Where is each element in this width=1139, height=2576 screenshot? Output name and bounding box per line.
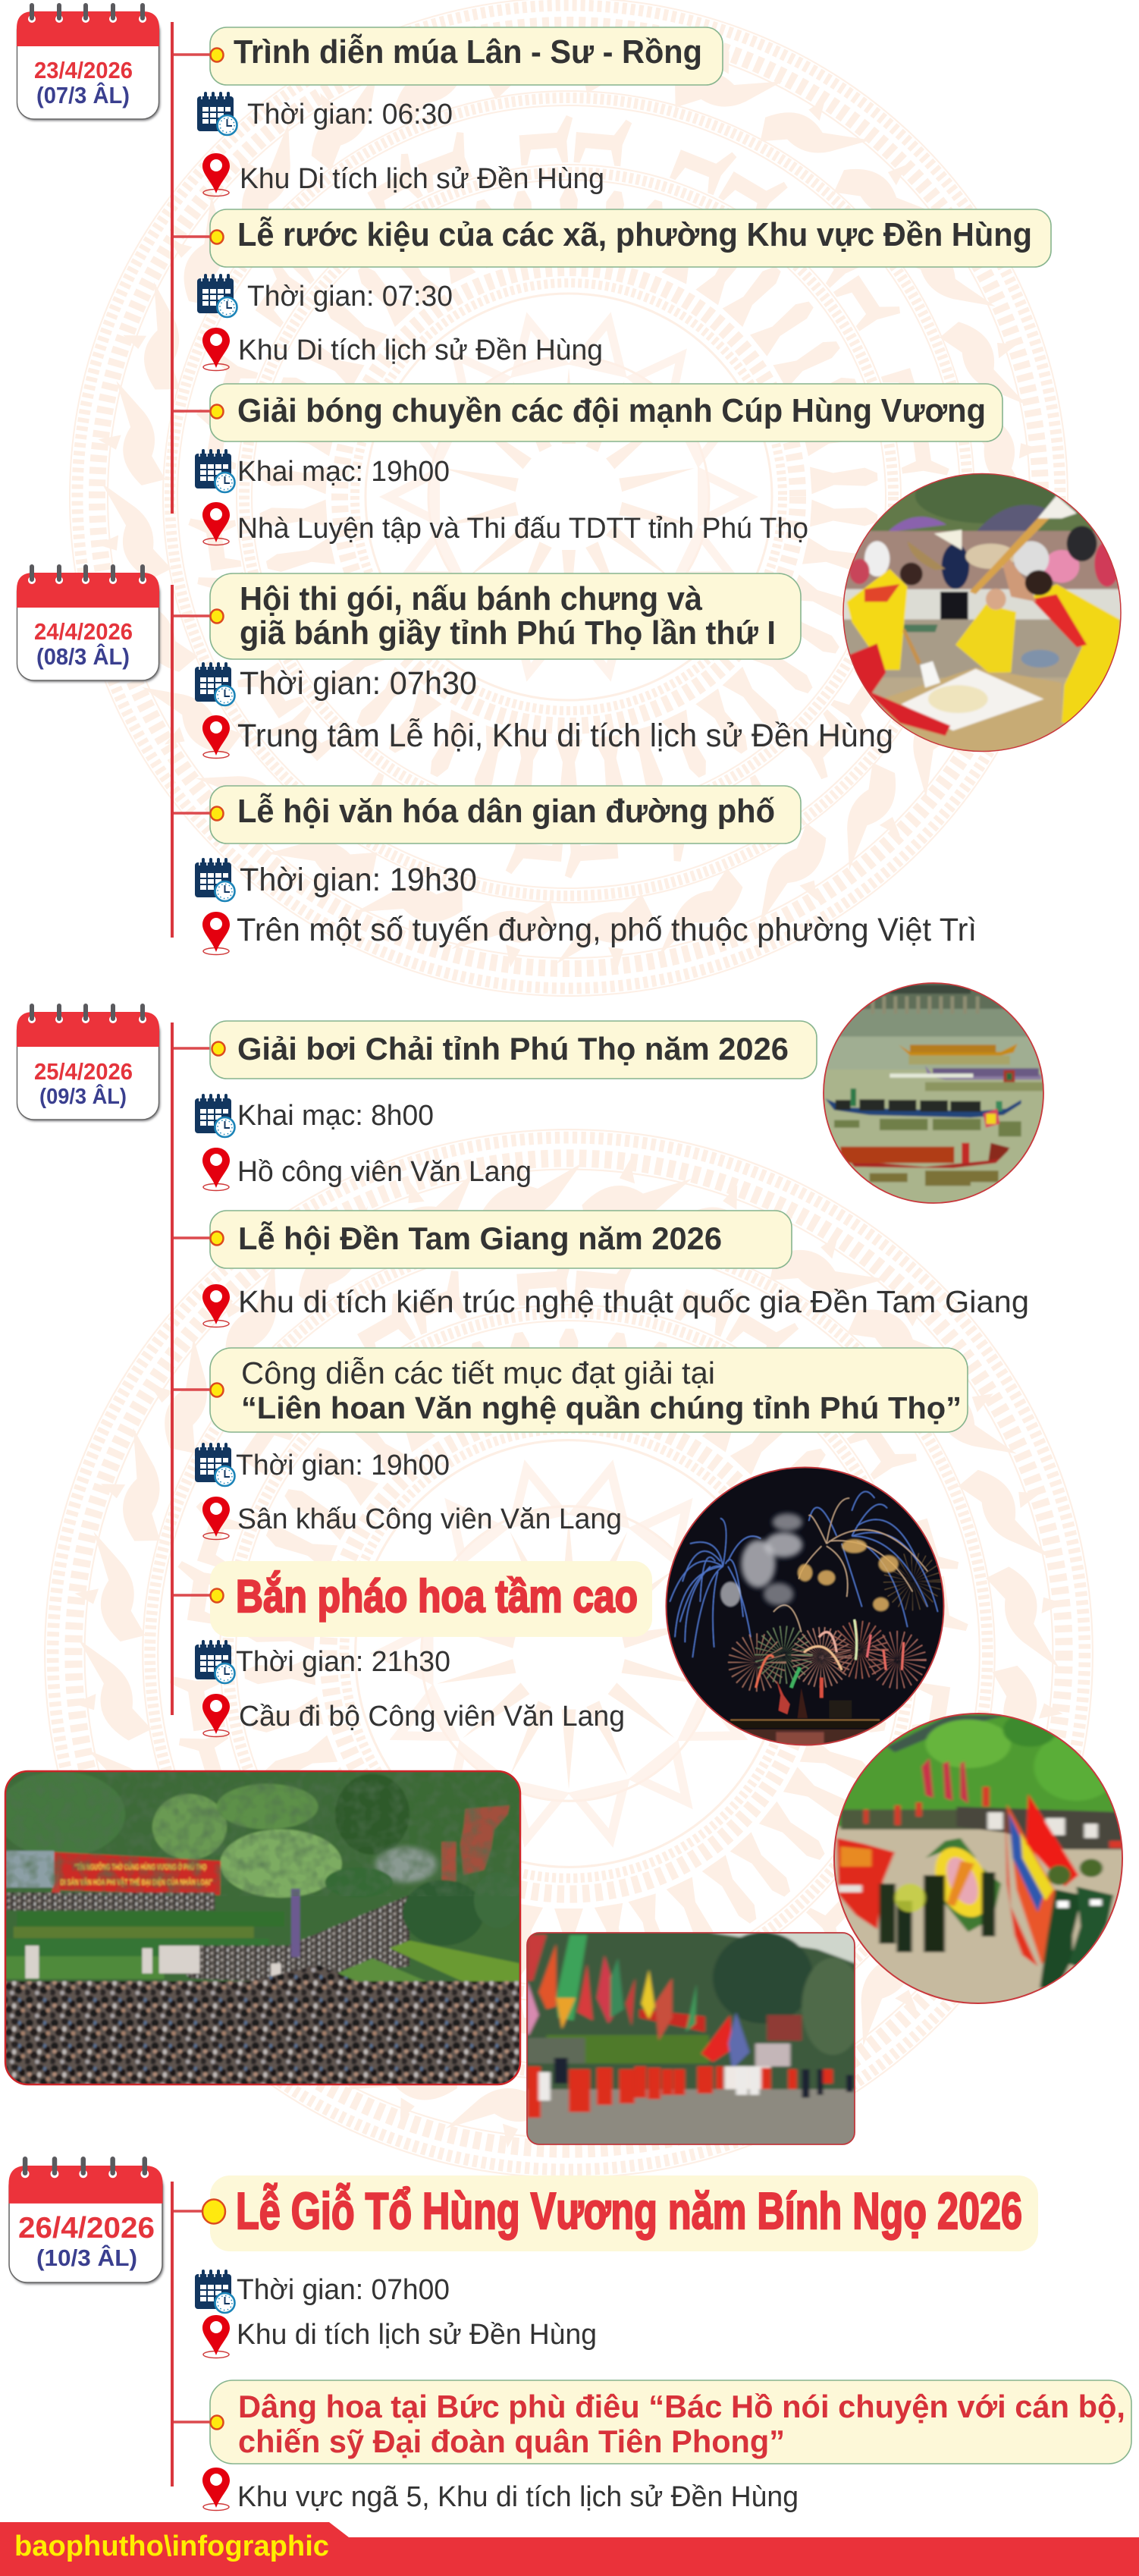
photo: crowd at Hùng Temple (0, 1764, 531, 2090)
event: Lễ hội văn hóa dân gian đường phố: Lễ hội văn hóa dân gian đường phố (237, 792, 775, 830)
timeline line (171, 2182, 174, 2486)
event: Giải bóng chuyền: Giải bóng chuyền các đội mạnh Cúp Hùng Vương (237, 392, 986, 429)
photo: rice cake pounding (843, 474, 1121, 751)
calendar: 23/4/2026 (17, 5, 160, 121)
location: Khu vực ngã 5 (202, 2468, 799, 2513)
location: Sân khấu Công viên Văn Lang: Sân khấu Công viên Văn Lang (237, 1503, 622, 1535)
photo: crowd at Hùng Temple: DI SẢN VĂN HÓA PHI VẬT THỂ ĐẠI DIỆN CỦA NHÂN LOẠI" (60, 1877, 212, 1887)
event: Hội thi gói, nấu bánh chưng (174, 573, 801, 659)
calendar: 23/4/2026: 23/4/2026 (34, 57, 133, 83)
time: 07:30: Thời gian: 07:30 (247, 281, 453, 313)
event: Hội thi gói, nấu bánh chưng: Hội thi gói, nấu bánh chưng và (240, 580, 702, 617)
event: Trình diễn múa Lân - Sư - Rồng: Trình diễn múa Lân - Sư - Rồng (234, 33, 702, 71)
calendar: 26/4/2026: 26/4/2026 (18, 2212, 155, 2245)
calendar: 25/4/2026: 25/4/2026 (34, 1058, 133, 1085)
photo: fireworks (667, 1469, 943, 1745)
time: Khai mạc 8h00 (195, 1095, 434, 1137)
time: 07:30 (197, 275, 453, 317)
time: Khai mạc 19h00: Khai mạc: 19h00 (237, 456, 450, 488)
time: 07h00: Thời gian: 07h00 (237, 2274, 450, 2306)
time: 07h00 (195, 2271, 450, 2313)
event: Công diễn các tiết mục (174, 1348, 968, 1432)
photo: flag procession (523, 1930, 864, 2152)
event: Lễ rước kiệu: Lễ rước kiệu của các xã, phường Khu vực Đền Hùng (237, 215, 1032, 253)
event: Giải bơi Chải (174, 1021, 817, 1079)
photo outline (843, 473, 1121, 751)
time: 19h30: Thời gian: 19h30 (240, 862, 477, 898)
location: Khu Di tích lịch sử Đền Hùng (202, 153, 604, 196)
time: 07h30: Thời gian: 07h30 (240, 665, 477, 702)
calendar: 24/4/2026: 24/4/2026 (34, 618, 133, 645)
time: 21h30 (195, 1641, 450, 1683)
event: Dâng hoa tại Bức phù điêu: Dâng hoa tại Bức phù điêu “Bác Hồ nói chuyện với cán bộ, (238, 2389, 1125, 2424)
location: Khu vực ngã 5: Khu vực ngã 5, Khu di tích lịch sử Đền Hùng (237, 2481, 799, 2513)
calendar: 25/4/2026 (17, 1006, 160, 1121)
calendar: 26/4/2026 (9, 2159, 164, 2284)
calendar: 23/4/2026: (07/3 ÂL) (36, 81, 130, 108)
location: Hồ công viên Văn Lang (202, 1148, 532, 1191)
location: Khu Di tích lịch sử Đền Hùng (202, 328, 603, 370)
location: Trên một số tuyến đường: Trên một số tuyến đường, phố thuộc phường Việt Trì (237, 912, 977, 948)
time: 06:30 (197, 93, 453, 135)
timeline line (171, 22, 174, 514)
photo: crowd at Hùng Temple: "TÍN NGƯỠNG THỜ CÚNG HÙNG VƯƠNG Ở PHÚ THỌ (74, 1862, 206, 1872)
location: Hồ công viên Văn Lang: Hồ công viên Văn Lang (237, 1156, 532, 1188)
panel: day 23/4/2026 (17, 5, 1051, 545)
photo outline (527, 1933, 855, 2144)
photo outline (5, 1771, 520, 2084)
photo outline (824, 983, 1043, 1203)
calendar: 25/4/2026: (09/3 ÂL) (39, 1083, 127, 1109)
calendar: 24/4/2026: (08/3 ÂL) (36, 642, 130, 670)
location: Khu Di tích lịch sử Đền Hùng: Khu Di tích lịch sử Đền Hùng (238, 335, 603, 366)
event: Dâng hoa tại Bức phù điêu (174, 2380, 1131, 2464)
background: lower bronze drum motif (45, 1129, 1093, 2178)
time: Khai mạc 8h00: Khai mạc: 8h00 (237, 1100, 434, 1132)
location: Khu Di tích lịch sử Đền Hùng: Khu Di tích lịch sử Đền Hùng (240, 163, 604, 195)
event: Công diễn các tiết mục: “Liên hoan Văn nghệ quần chúng tỉnh Phú Thọ” (241, 1390, 962, 1425)
event: Công diễn các tiết mục: Công diễn các tiết mục đạt giải tại (241, 1356, 715, 1390)
event: Bắn pháo hoa tầm cao (174, 1561, 652, 1637)
background: upper bronze drum motif (70, 0, 1068, 996)
event: Lễ Giỗ Tổ Hùng Vương (174, 2175, 1038, 2251)
panel: day 25/4/2026 (17, 1006, 1029, 1737)
event: Lễ rước kiệu (174, 209, 1051, 267)
location: Khu di tích lịch sử Đền Hùng (202, 2315, 597, 2358)
event: Lễ hội Đền Tam Giang (174, 1211, 792, 1268)
location: Cầu đi bộ Công viên Văn Lang (202, 1694, 625, 1737)
timeline line (171, 1023, 174, 1715)
panel: day 26/4/2026 (9, 2159, 1131, 2513)
event: Giải bóng chuyền (174, 384, 1003, 441)
event: Trình diễn múa Lân - Sư - Rồng (174, 27, 723, 85)
event: Hội thi gói, nấu bánh chưng: giã bánh giầy tỉnh Phú Thọ lần thứ I (240, 614, 776, 652)
time: 19h00 (195, 1444, 450, 1486)
panel: day 24/4/2026 (17, 567, 977, 954)
photo: dragon boat racing (819, 979, 1046, 1206)
location: Nhà Luyện tập: Nhà Luyện tập và Thi đấu TDTT tỉnh Phú Thọ (237, 513, 808, 545)
location: Sân khấu Công viên Văn Lang (202, 1497, 622, 1540)
location: Nhà Luyện tập (202, 502, 808, 545)
event: Dâng hoa tại Bức phù điêu: chiến sỹ Đại đoàn quân Tiên Phong” (238, 2424, 785, 2459)
photo outline (666, 1467, 943, 1745)
event: Bắn pháo hoa tầm cao: Bắn pháo hoa tầm cao (236, 1571, 638, 1622)
location: Khu di tích lịch sử Đền Hùng: Khu di tích lịch sử Đền Hùng (237, 2319, 597, 2351)
event: Lễ hội Đền Tam Giang: Lễ hội Đền Tam Giang năm 2026 (238, 1220, 722, 1256)
event: Lễ hội văn hóa dân gian đường phố (174, 786, 801, 843)
time: 21h30: Thời gian: 21h30 (236, 1646, 450, 1678)
location: Trung tâm Lễ hội: Trung tâm Lễ hội, Khu di tích lịch sử Đền Hùng (237, 718, 893, 754)
photo outline (834, 1714, 1122, 2003)
time: 06:30: Thời gian: 06:30 (247, 99, 453, 130)
footer bar (0, 2522, 1139, 2576)
location: Khu di tích kiến trúc: Khu di tích kiến trúc nghệ thuật quốc gia Đền Tam Giang (238, 1284, 1029, 1319)
timeline line (171, 585, 174, 938)
time: Khai mạc 19h00 (195, 451, 450, 492)
time: 19h00: Thời gian: 19h00 (236, 1450, 450, 1481)
calendar: 24/4/2026 (17, 567, 160, 682)
location: Cầu đi bộ Công viên Văn Lang: Cầu đi bộ Công viên Văn Lang (239, 1701, 625, 1733)
footer bar: baophutho\infographic (14, 2530, 329, 2562)
calendar: 26/4/2026: (10/3 ÂL) (36, 2244, 137, 2271)
photo: wreath-laying soldiers (833, 1713, 1131, 2006)
event: Giải bơi Chải: Giải bơi Chải tỉnh Phú Thọ năm 2026 (237, 1031, 789, 1067)
